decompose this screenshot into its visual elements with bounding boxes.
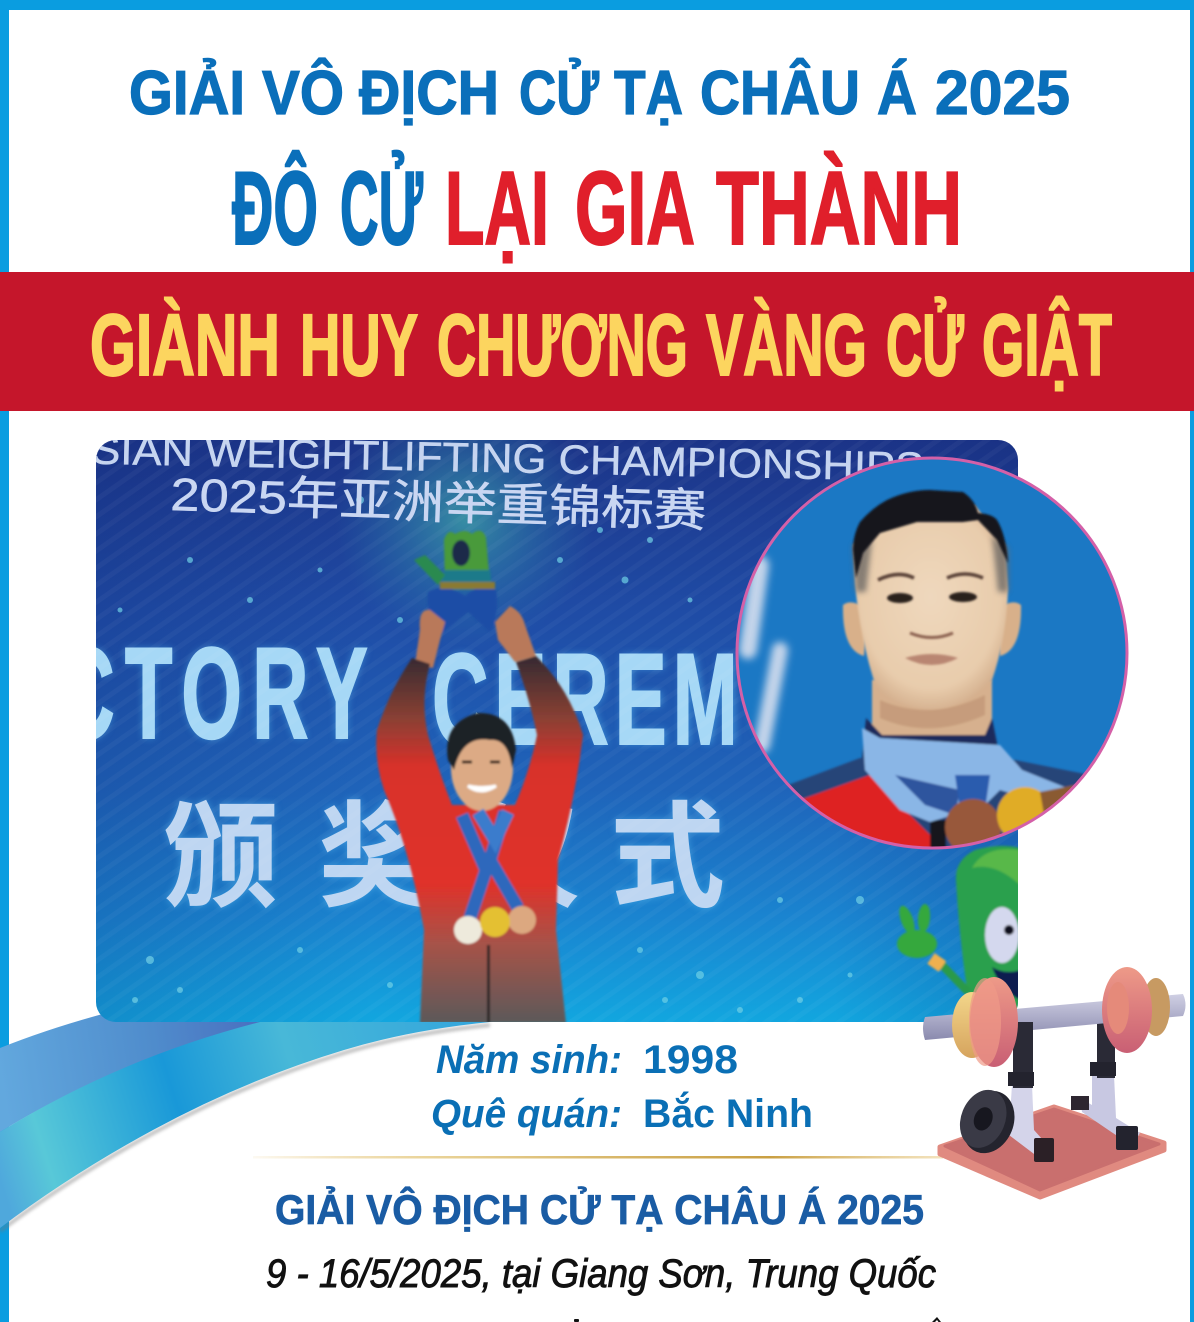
blue ribbon swoosh — [0, 1012, 490, 1231]
title line 2: athlete name: THÀNH — [716, 151, 962, 267]
backdrop text: CEREMONY: CEREMONY — [432, 626, 931, 772]
title line 2: athlete name: GIA — [575, 151, 695, 267]
athlete birth year — [436, 1038, 738, 1082]
title line 1: ĐỊCH — [359, 59, 499, 128]
banner heading: GIẬT — [982, 297, 1112, 394]
head — [451, 725, 513, 811]
blurred cord in background — [748, 565, 780, 745]
event heading: GIẢI VÔ ĐỊCH CỬ TẠ CHÂU Á 2025 — [275, 1185, 924, 1233]
title line 1: 2025 — [935, 59, 1070, 128]
banner heading: HUY — [300, 297, 418, 394]
medal ribbons on chest — [862, 728, 1072, 822]
right plates — [1142, 978, 1170, 1036]
ears — [843, 602, 868, 656]
face — [853, 505, 1008, 709]
title line 2: athlete name: LẠI — [445, 151, 549, 267]
diagonal stripe texture — [184, 666, 1016, 1022]
athlete on podium — [376, 531, 583, 1023]
cropped next text line: accent marks — [574, 1317, 941, 1322]
medal ribbons — [462, 812, 518, 918]
backdrop text: ceremony in Chinese: 颁奖仪式 — [163, 794, 725, 922]
banner heading: CỬ — [886, 297, 964, 394]
title line 2: athlete name: CỬ — [340, 150, 423, 267]
title line 2: athlete name — [232, 150, 962, 267]
portrait circle of athlete — [736, 457, 1128, 860]
backdrop heading: Chinese: 2025年亚洲举重锦标赛 — [170, 468, 707, 537]
banner heading: CHƯƠNG — [437, 297, 688, 394]
small mascot trophy — [414, 531, 497, 635]
backdrop glow behind big text: CEREMONY — [432, 626, 935, 772]
bronze medal — [945, 799, 1001, 855]
red banner — [0, 272, 1194, 411]
title line 1: CHÂU — [700, 59, 860, 128]
neck — [870, 678, 994, 738]
banner heading: VÀNG — [706, 297, 867, 394]
back upright — [1080, 1075, 1140, 1146]
three medals — [454, 906, 536, 944]
jersey — [789, 678, 1084, 846]
forearms and hands — [415, 610, 445, 668]
title line 1: VÔ — [262, 59, 344, 128]
backdrop sparkles — [118, 496, 864, 1013]
title line 1 — [129, 59, 1070, 128]
hair — [853, 490, 1008, 578]
large mascot at right — [896, 846, 1020, 1022]
backdrop glow behind big text: 颁奖仪式 — [163, 794, 725, 922]
hair fade at temples — [853, 535, 1008, 592]
red national team jacket — [376, 656, 583, 1023]
gold medal — [996, 786, 1045, 834]
front upright — [1005, 1085, 1050, 1160]
title line 1: Á — [877, 59, 917, 128]
title line 1: TẠ — [614, 59, 683, 128]
banner heading: GIÀNH — [90, 297, 280, 394]
event date and venue: 9 - 16/5/2025, tại Giang Sơn, Trung Quốc — [266, 1252, 936, 1296]
title line 1: GIẢI — [129, 59, 245, 128]
hometown label: Quê quán: — [431, 1092, 622, 1136]
backdrop glow behind big text — [96, 644, 738, 910]
bar — [923, 994, 1186, 1040]
left plates — [952, 992, 992, 1058]
rack base — [940, 1107, 1164, 1197]
main photo: victory ceremony — [0, 390, 1020, 1023]
title line 1: CỬ — [519, 59, 599, 128]
icon: barbell on rack — [923, 967, 1186, 1197]
birth year value: 1998 — [643, 1038, 738, 1082]
title line 2: athlete name: ĐÔ — [232, 150, 318, 267]
backdrop heading: English: ASIAN WEIGHTLIFTING CHAMPIONSHIPS — [62, 426, 925, 490]
facial features — [878, 574, 983, 665]
birth year label: Năm sinh: — [436, 1038, 622, 1082]
banner heading — [90, 297, 1112, 394]
athlete hometown — [431, 1090, 813, 1136]
hometown value: Bắc Ninh — [643, 1090, 813, 1136]
loose black plate — [950, 1082, 1024, 1161]
